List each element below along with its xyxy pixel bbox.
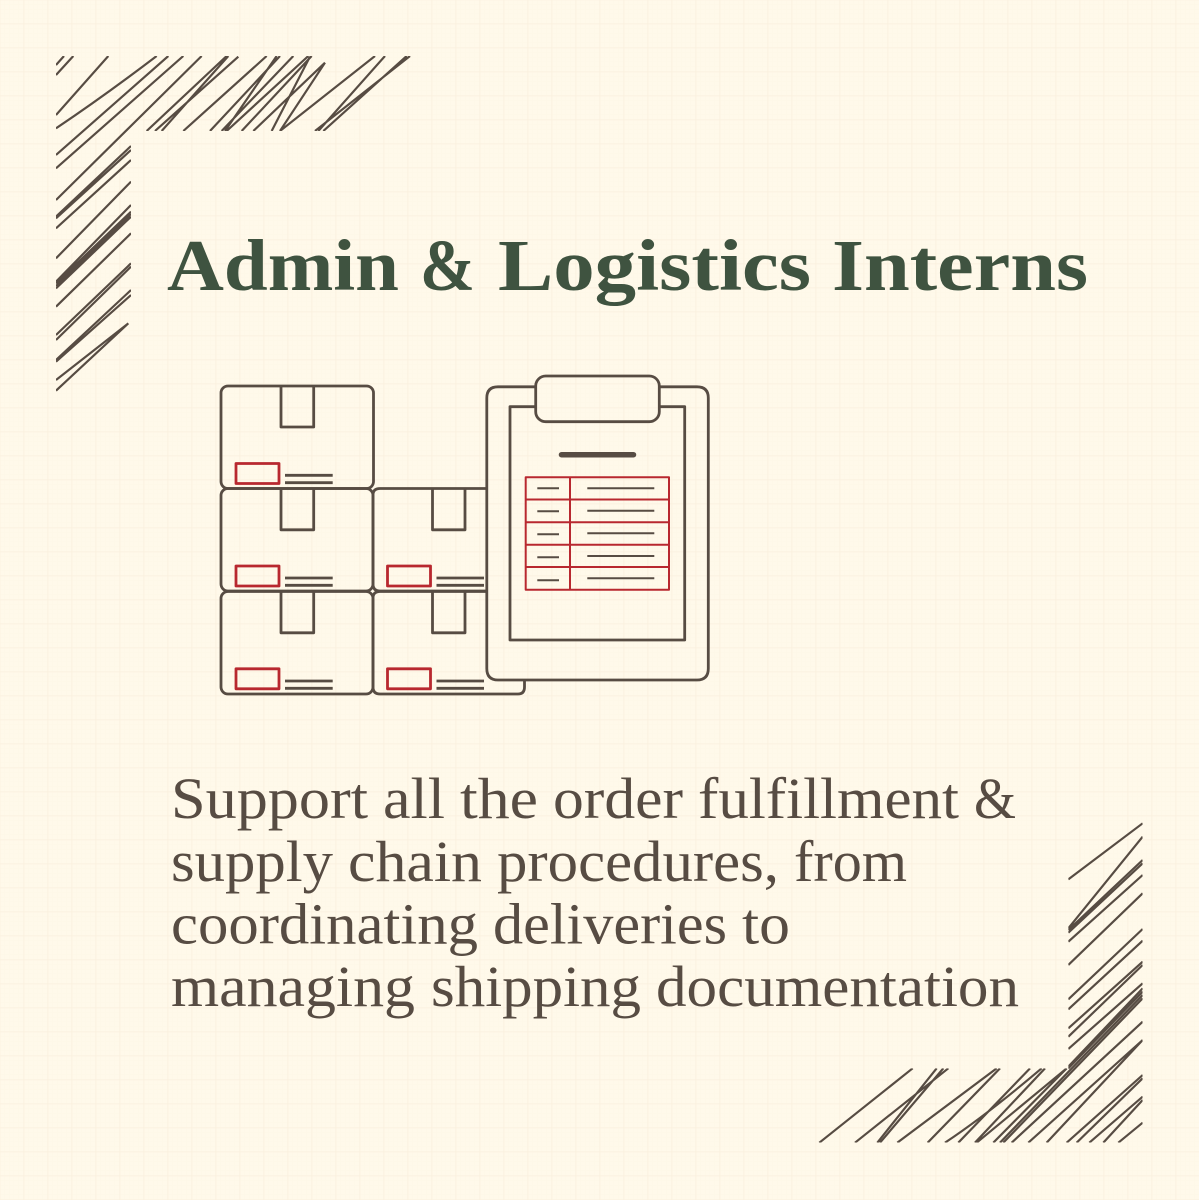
title: Logistics [498, 225, 811, 306]
line 3: to [742, 892, 790, 956]
line 2: procedures, [497, 829, 779, 894]
line 1: the [460, 766, 538, 831]
title [167, 225, 1088, 306]
box: middle left [221, 488, 373, 591]
line 4: documentation [656, 954, 1019, 1019]
box: middle right [373, 488, 487, 591]
heading bar [562, 452, 634, 457]
line 3: deliveries [493, 892, 727, 956]
line 3: coordinating [171, 892, 478, 956]
clipboard clip [536, 376, 659, 422]
line 2: chain [348, 829, 482, 894]
icon: stacked boxes [221, 386, 524, 694]
line 1: order [553, 766, 683, 831]
box: top of left stack [221, 386, 374, 488]
line 4: shipping [431, 954, 641, 1019]
box: bottom left [221, 592, 373, 694]
line 1: Support [171, 766, 368, 831]
clipboard paper [510, 407, 685, 640]
line 4 [171, 954, 1019, 1019]
line 1: all [383, 766, 445, 831]
description text [171, 766, 1019, 1019]
table lines [537, 488, 654, 580]
line 3 [171, 892, 790, 956]
box: bottom right [373, 592, 524, 694]
line 2 [171, 829, 907, 894]
icon: clipboard [487, 376, 708, 680]
hatched corner: bottom right [819, 823, 1143, 1143]
line 2: from [794, 829, 907, 894]
line 1: fulfillment [698, 766, 959, 831]
title: Admin [167, 225, 399, 306]
title: & [420, 225, 475, 306]
line 1 [171, 766, 1016, 831]
clipboard board [487, 387, 708, 680]
line 4: managing [171, 954, 415, 1019]
hatched corner: top left [56, 56, 410, 391]
line 1: & [974, 766, 1016, 831]
red table grid [526, 477, 669, 590]
line 2: supply [171, 829, 333, 894]
title: Interns [832, 225, 1088, 306]
